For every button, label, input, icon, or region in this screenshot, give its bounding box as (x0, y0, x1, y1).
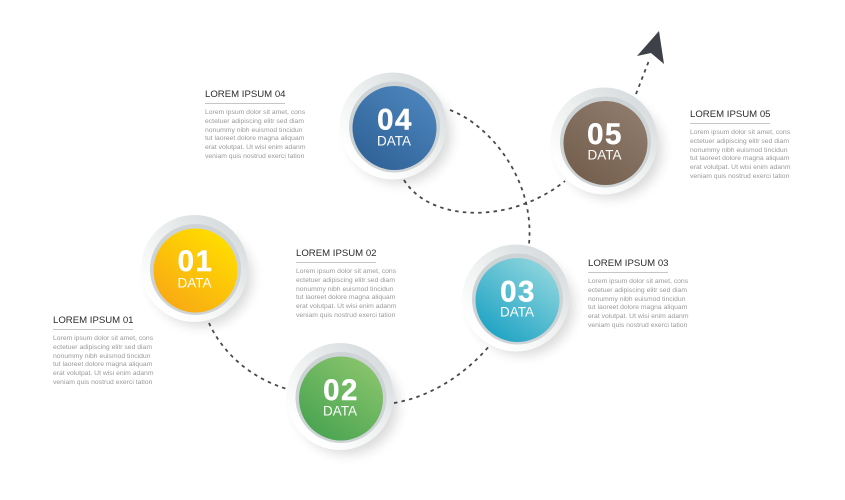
node 04: DATA (377, 134, 411, 148)
node 01: 01 (178, 245, 213, 278)
text block 03: ectetuer adipiscing elitr sed diam (588, 287, 687, 294)
text block 03: erat volutpat. Ut wisi enim adanm (588, 313, 688, 320)
text block 04: ectetuer adipiscing elitr sed diam (205, 118, 304, 125)
text block 04: erat volutpat. Ut wisi enim adanm (205, 144, 306, 151)
node 03: DATA (500, 304, 534, 320)
text block 01: nonummy nibh euismod tincidun (53, 353, 150, 360)
text block 02: Lorem ipsum dolor sit amet, cons (296, 268, 396, 275)
node 03: 03 (500, 276, 536, 308)
dashed path: 01 to 02 (209, 323, 287, 389)
icon: arrow head (637, 31, 664, 64)
text block 01: Lorem ipsum dolor sit amet, cons (53, 335, 153, 342)
text block 05: erat volutpat. Ut wisi enim adanm (690, 164, 790, 171)
node 05 (550, 88, 662, 198)
text block 04: Lorem ipsum dolor sit amet, cons (205, 109, 305, 116)
text block 02: nonummy nibh euismod tincidun (296, 286, 393, 293)
dashed path: 02 to 03 (394, 344, 491, 403)
node 01 (141, 215, 252, 326)
text block 04: nonummy nibh euismod tincidun (205, 127, 302, 134)
text block 02: LOREM IPSUM 02 (296, 248, 377, 259)
text block 01: ectetuer adipiscing elitr sed diam (53, 344, 152, 351)
text block 05: ectetuer adipiscing elitr sed diam (690, 138, 789, 145)
text block 05 (690, 109, 790, 180)
text block 02: tut laoreet dolore magna aliquam (296, 294, 395, 301)
text block 05: tut laoreet dolore magna aliquam (690, 155, 789, 162)
text block 02: ectetuer adipiscing elitr sed diam (296, 277, 395, 284)
node 04 (340, 72, 451, 183)
node 05: DATA (587, 148, 622, 162)
text block 04: veniam quis nostrud exerci tation (205, 153, 304, 160)
text block 05: Lorem ipsum dolor sit amet, cons (690, 129, 790, 136)
text block 01 (53, 315, 154, 386)
text block 03: Lorem ipsum dolor sit amet, cons (588, 278, 688, 285)
text block 04 (205, 89, 306, 160)
text block 03: veniam quis nostrud exerci tation (588, 322, 687, 329)
text block 05: veniam quis nostrud exerci tation (690, 173, 789, 180)
dashed path: 03 to 04 (450, 110, 530, 244)
text block 03: tut laoreet dolore magna aliquam (588, 304, 687, 311)
text block 02: erat volutpat. Ut wisi enim adanm (296, 303, 396, 310)
node 02 (286, 343, 398, 454)
dashed path: 05 to arrow (636, 58, 650, 94)
text block 04: LOREM IPSUM 04 (205, 89, 286, 100)
text block 03: nonummy nibh euismod tincidun (588, 296, 685, 303)
node 03 (462, 244, 574, 355)
text block 01: erat volutpat. Ut wisi enim adanm (53, 370, 154, 377)
text block 02: veniam quis nostrud exerci tation (296, 312, 395, 319)
text block 01: tut laoreet dolore magna aliquam (53, 361, 152, 368)
dashed path: 04 to 05 (404, 180, 565, 213)
text block 02 (296, 248, 396, 319)
text block 05: LOREM IPSUM 05 (690, 109, 771, 120)
text block 03 (588, 258, 688, 329)
text block 03: LOREM IPSUM 03 (588, 258, 669, 269)
node 05: 05 (587, 118, 623, 151)
text block 01: veniam quis nostrud exerci tation (53, 379, 152, 386)
node 04: 04 (377, 104, 413, 136)
text block 05: nonummy nibh euismod tincidun (690, 147, 787, 154)
text block 04: tut laoreet dolore magna aliquam (205, 135, 304, 142)
text block 01: LOREM IPSUM 01 (53, 315, 134, 326)
node 02: 02 (323, 374, 359, 407)
node 01: DATA (177, 276, 212, 290)
node 02: DATA (323, 404, 357, 418)
